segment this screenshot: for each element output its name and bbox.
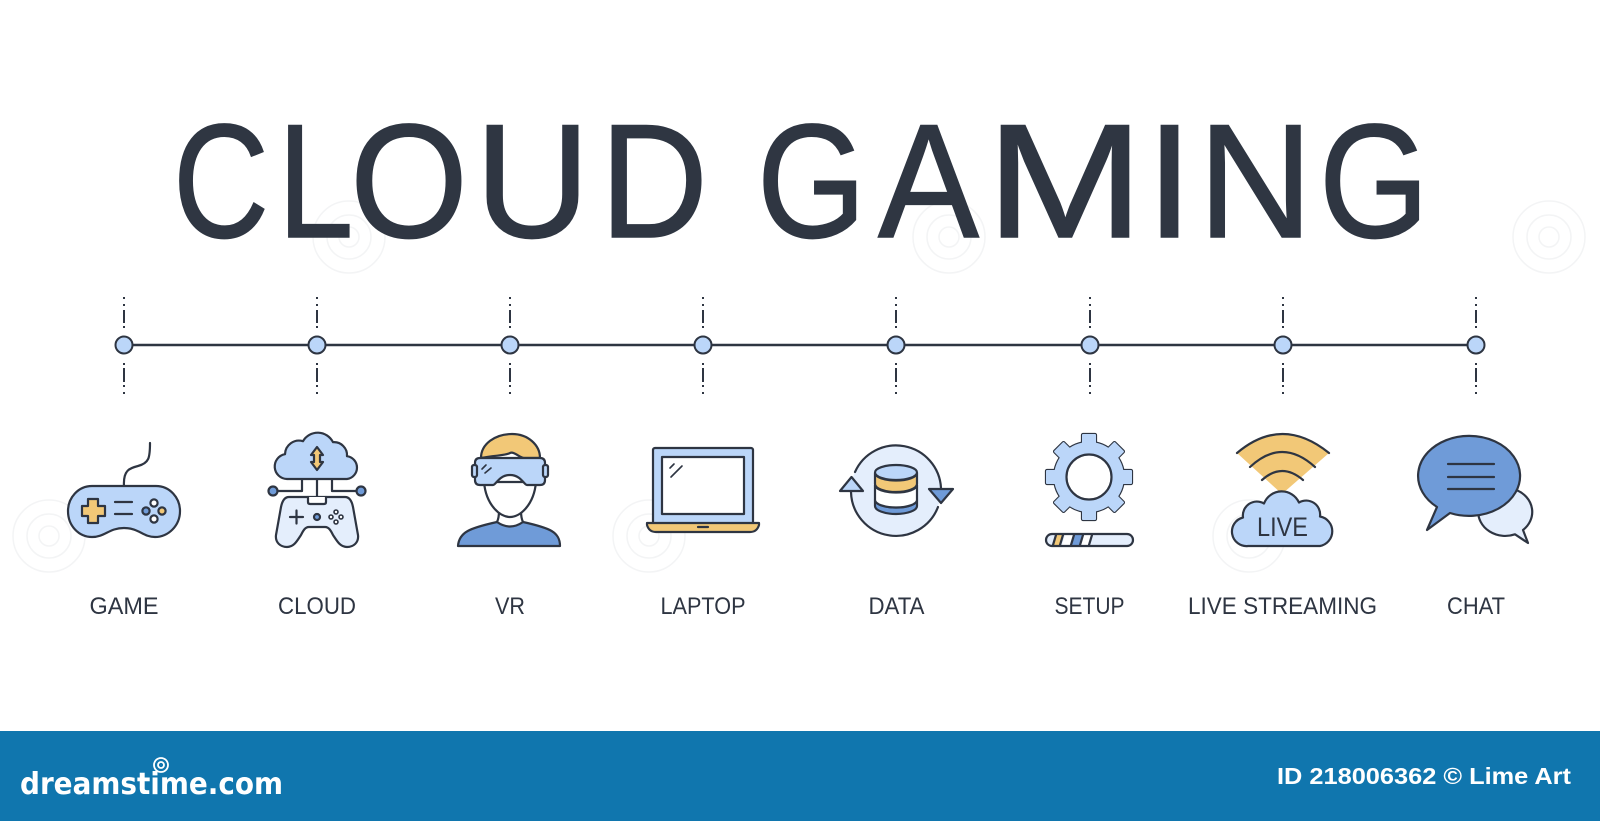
icon: data sync bbox=[840, 445, 953, 536]
label: CLOUD: CLOUD bbox=[278, 593, 356, 620]
label: LIVE STREAMING: LIVE STREAMING bbox=[1188, 593, 1377, 620]
label: SETUP: SETUP bbox=[1054, 593, 1124, 620]
title: N bbox=[1198, 91, 1313, 272]
footer credit: ID 218006362 © Lime Art bbox=[1277, 763, 1571, 789]
icon: cloud with controller bbox=[268, 433, 366, 547]
footer band bbox=[0, 731, 1600, 821]
title: C bbox=[173, 91, 269, 272]
timeline bbox=[116, 297, 1484, 394]
title: O bbox=[350, 91, 468, 272]
icon: live streaming bbox=[1232, 434, 1332, 546]
label: DATA: DATA bbox=[868, 593, 924, 620]
label: LAPTOP: LAPTOP bbox=[660, 593, 746, 620]
icon: setup gear bbox=[1046, 434, 1133, 546]
title: A bbox=[878, 91, 979, 272]
title: U bbox=[475, 91, 590, 272]
label: CHAT: CHAT bbox=[1447, 593, 1505, 620]
title: I bbox=[1145, 91, 1194, 272]
title: G bbox=[757, 91, 866, 272]
footer logo: dreamstime.com bbox=[20, 767, 283, 802]
title: G bbox=[1319, 91, 1429, 272]
icon: laptop bbox=[647, 448, 759, 532]
title: D bbox=[600, 91, 708, 272]
icon: live streaming: LIVE bbox=[1257, 512, 1308, 542]
label: GAME: GAME bbox=[90, 593, 158, 620]
icon: VR headset person bbox=[458, 434, 560, 546]
icon: chat bubbles bbox=[1418, 436, 1532, 543]
label: VR: VR bbox=[495, 593, 525, 620]
icon: game controller bbox=[68, 443, 180, 537]
title: M bbox=[986, 91, 1144, 272]
title: L bbox=[278, 91, 354, 272]
